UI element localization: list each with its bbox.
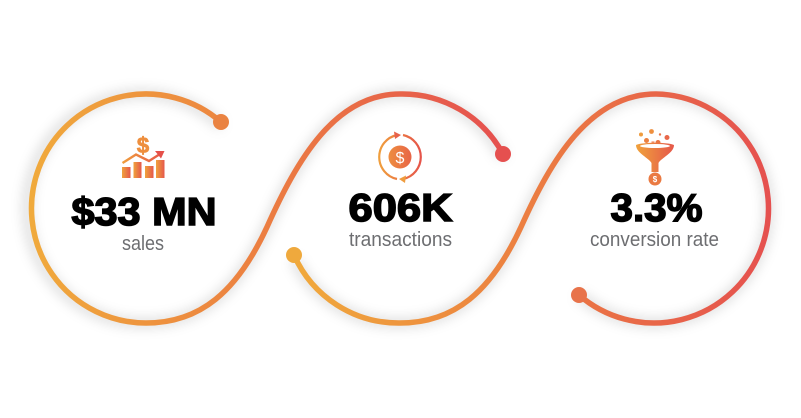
connector: curve from sales ring to transactions ring: [31, 94, 511, 323]
stat: transactions label: transactions: [349, 229, 452, 251]
icon: sales chart with dollar: $: [137, 133, 149, 158]
icon: conversion funnel with coin: [636, 129, 674, 186]
icon: conversion funnel with coin: $: [653, 175, 658, 184]
stat: transactions value: 606K: [348, 187, 452, 230]
connector: curve from transactions ring to conversion ring: [286, 94, 768, 323]
stat: conversion value: 3.3%: [610, 187, 702, 230]
soft ring shadows: [27, 94, 768, 323]
stat: sales label: sales: [122, 233, 164, 255]
icon: sales chart with dollar: [122, 133, 164, 178]
icon: transactions cycle with dollar: [379, 132, 421, 183]
stat: sales value: $33 MN: [72, 191, 216, 234]
stat: conversion label: conversion rate: [590, 229, 719, 251]
icon: transactions cycle with dollar: $: [396, 150, 405, 167]
